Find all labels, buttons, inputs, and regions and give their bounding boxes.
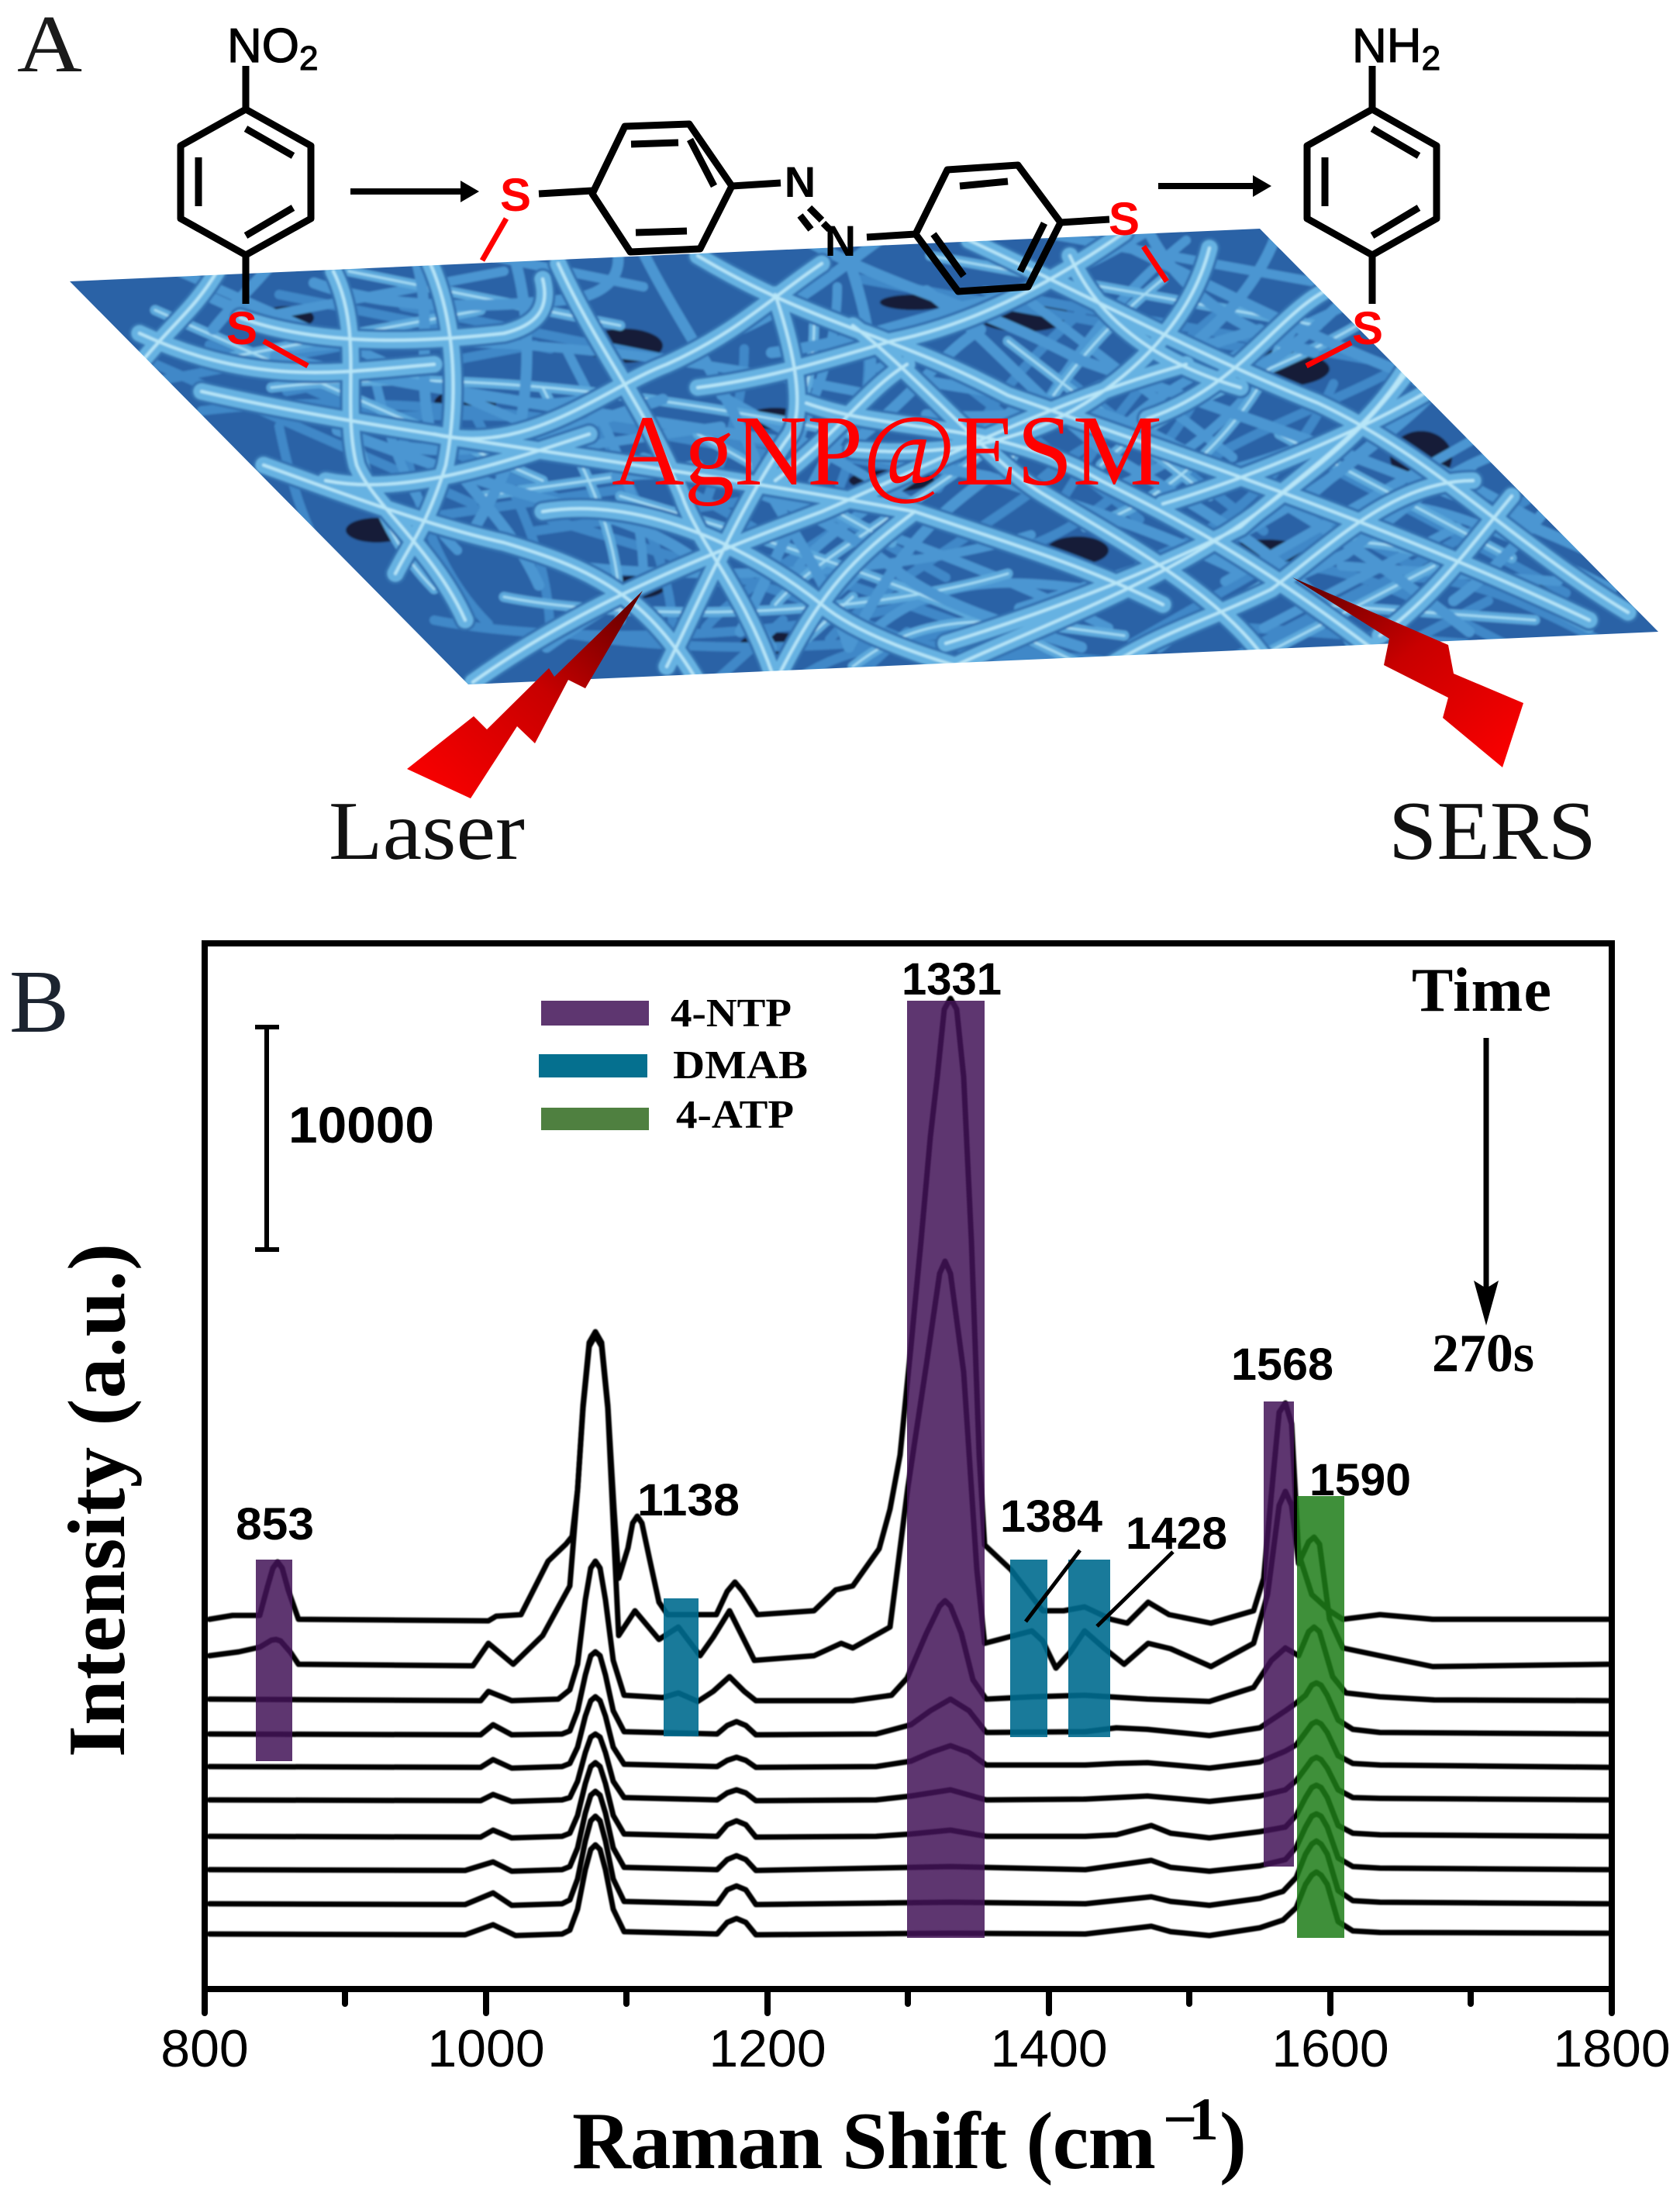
arrow [1158, 175, 1271, 197]
label: N: N [785, 157, 816, 206]
spectra traces [209, 998, 1609, 1936]
label: NH2: NH [1352, 19, 1422, 73]
legend label 4-ATP: 4-ATP [676, 1093, 794, 1137]
label: S left: S [500, 169, 531, 221]
bond right [1144, 246, 1167, 281]
highlight bands [256, 1001, 1344, 1938]
x tick labels: 1200 [709, 2019, 826, 2078]
panel B: time-resolved Raman spectra [9, 943, 1671, 2186]
label: S right: S [1109, 193, 1140, 245]
arrow: time direction [1474, 1038, 1499, 1326]
icon: SERS bolt [1292, 577, 1523, 767]
scale value: 10000 [288, 1096, 434, 1153]
x tick labels [160, 2019, 1671, 2078]
x tick labels: 1800 [1553, 2019, 1671, 2078]
bond left [482, 219, 506, 260]
label: NH2: 2 [1422, 40, 1440, 78]
label: NO2: NO [227, 19, 299, 73]
molecule: DMAB [482, 124, 1167, 291]
peak label 1138: 1138 [637, 1475, 740, 1525]
callout lines [1026, 1550, 1173, 1626]
legend label 4-NTP: 4-NTP [671, 991, 792, 1036]
x tick labels: 1600 [1271, 2019, 1389, 2078]
peak label 1428: 1428 [1126, 1508, 1227, 1559]
molecule: 4-NTP [181, 19, 318, 366]
peak label 1568: 1568 [1231, 1339, 1333, 1390]
peak label 1590: 1590 [1309, 1455, 1411, 1505]
legend label DMAB: DMAB [673, 1043, 808, 1088]
label: AgNP@ESM: AgNP@ESM [612, 395, 1162, 507]
x tick labels: 800 [160, 2019, 249, 2078]
panel letter A: A [17, 0, 82, 89]
panel A: reaction on AgNP@ESM [17, 0, 1680, 877]
peak label 853: 853 [236, 1499, 314, 1550]
scale bar [255, 1027, 434, 1250]
label: Laser: Laser [329, 785, 525, 877]
panel letter B: B [9, 953, 69, 1052]
bond to surface [1306, 343, 1351, 366]
y axis title: Intensity (a.u.) [51, 1243, 142, 1757]
label: SERS: SERS [1389, 785, 1596, 877]
x axis title: Raman Shift (cm [572, 2095, 1156, 2186]
label: S: S [1352, 302, 1383, 354]
x axis title: −1 [1163, 2085, 1219, 2153]
peak label 1384: 1384 [1000, 1491, 1102, 1542]
label: NO2: 2 [299, 40, 318, 78]
peak label 1331: 1331 [902, 954, 1002, 1005]
label: Time: Time [1412, 957, 1551, 1025]
label: S: S [226, 302, 257, 354]
label: 270s: 270s [1432, 1324, 1534, 1384]
bond to surface [264, 341, 308, 366]
x axis title: ) [1219, 2095, 1247, 2186]
SEM fiber sheet [70, 229, 1658, 684]
molecule: 4-ATP [1306, 19, 1440, 366]
arrow [350, 181, 479, 202]
plot frame and ticks [205, 943, 1612, 2013]
x tick labels: 1400 [990, 2019, 1108, 2078]
icon: laser bolt [407, 591, 643, 798]
label: N: N [825, 216, 856, 265]
x tick labels: 1000 [427, 2019, 545, 2078]
legend [539, 991, 808, 1137]
